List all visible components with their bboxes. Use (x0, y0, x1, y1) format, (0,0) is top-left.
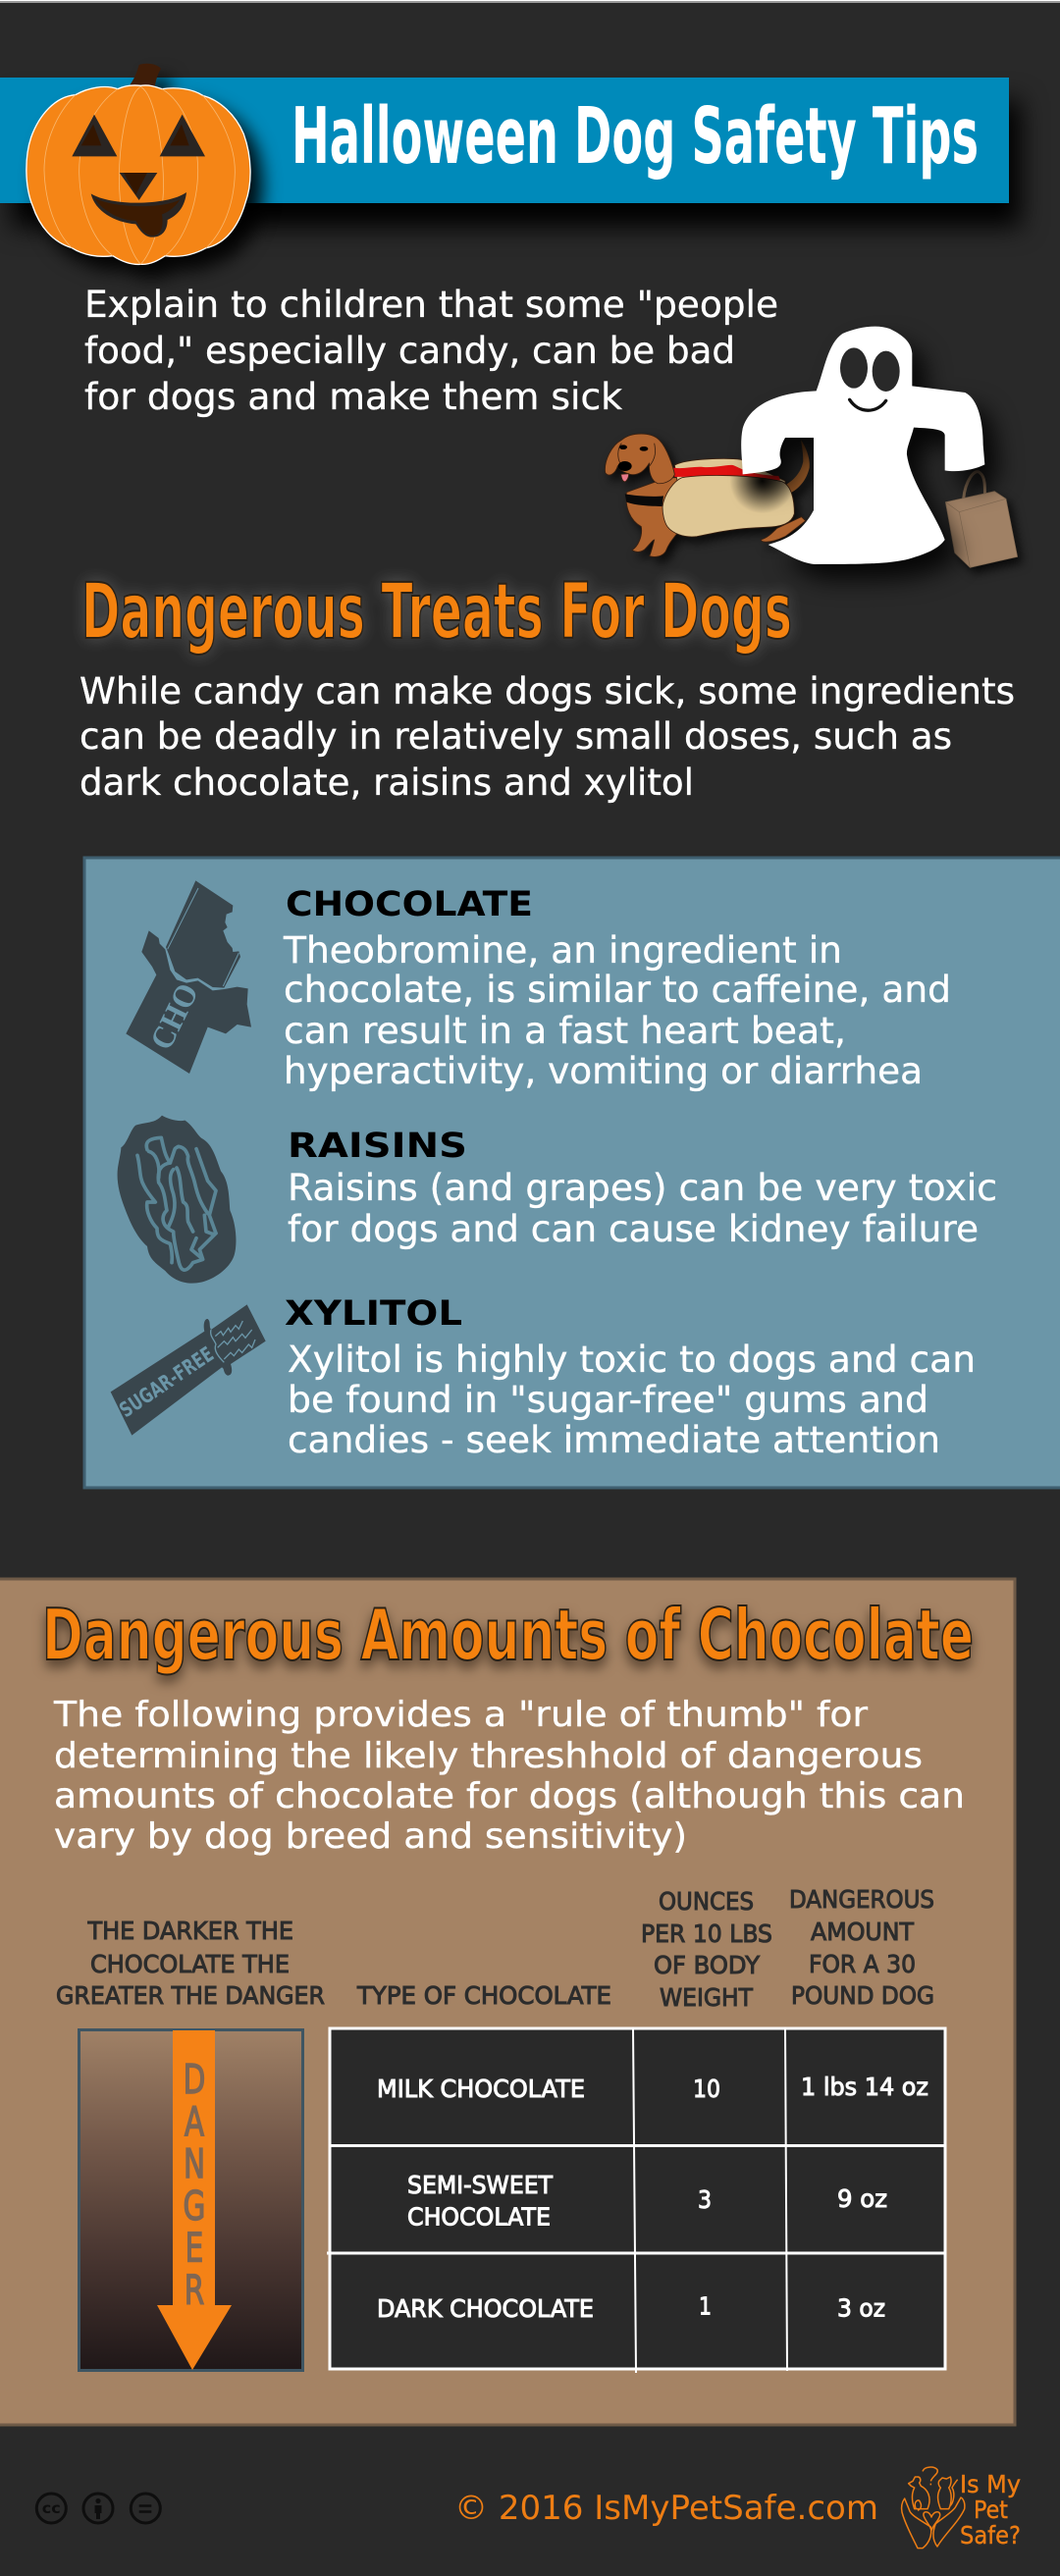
logo wordmark: Is My (960, 2470, 1021, 2498)
text: xylitol: XYLITOL (285, 1294, 462, 1334)
text: rule of thumb (53, 1695, 965, 1857)
footer copyright: © 2016 IsMyPetSafe.com (454, 2489, 878, 2528)
column header: dangerous amount: AMOUNT (811, 1918, 915, 1946)
text: chocolate (283, 885, 951, 1092)
column header: dangerous amount (789, 1885, 934, 2010)
text: treats intro: can be deadly in relatively small doses, such as (80, 715, 952, 758)
table: chocolate amounts (327, 2028, 945, 2373)
row: dark chocolate: 3 oz (837, 2294, 885, 2322)
intro text (84, 284, 778, 418)
intro text: for dogs and make them sick (84, 376, 623, 418)
column header: ounces per 10 lbs: WEIGHT (660, 1983, 754, 2012)
icon: chocolate bar (126, 880, 251, 1074)
row: milk chocolate: MILK CHOCOLATE (377, 2075, 585, 2103)
text: rule of thumb: vary by dog breed and sensitivity) (54, 1816, 687, 1857)
label: danger (184, 2057, 205, 2314)
label: danger: D (184, 2057, 205, 2103)
chart: darkness gradient with danger arrow (79, 2029, 302, 2371)
row: semi-sweet chocolate: SEMI-SWEET (407, 2171, 554, 2199)
row: dark chocolate: DARK CHOCOLATE (377, 2294, 594, 2323)
icon: ghost (741, 327, 984, 564)
row: semi-sweet chocolate: 9 oz (837, 2184, 887, 2213)
title banner (0, 78, 1009, 203)
label: danger: N (184, 2141, 205, 2187)
row: semi-sweet chocolate: CHOCOLATE (407, 2202, 551, 2232)
intro text: food," especially candy, can be bad (84, 330, 735, 372)
logo wordmark: Safe? (960, 2521, 1021, 2550)
text: chocolate: CHOCOLATE (286, 885, 533, 924)
row: dark chocolate (377, 2292, 885, 2323)
text: xylitol: Xylitol is highly toxic to dogs and can (288, 1339, 976, 1381)
panel: dangerous amounts of chocolate (0, 1579, 1015, 2425)
text: chocolate: hyperactivity, vomiting or diarrhea (284, 1050, 923, 1092)
text: sugar-free label: SUGAR-FREE (115, 1342, 218, 1422)
panel: toxic ingredients (84, 858, 1060, 1488)
intro text: Explain to children that some "people (84, 284, 778, 326)
text: raisins: Raisins (and grapes) can be very toxic (288, 1167, 997, 1209)
text: xylitol: be found in "sugar-free" gums and (288, 1379, 928, 1421)
text: rule of thumb: determining the likely threshhold of dangerous (54, 1736, 923, 1776)
text: treats intro: dark chocolate, raisins and xylitol (80, 762, 694, 804)
column header: dangerous amount: DANGEROUS (789, 1885, 934, 1914)
text: raisins (288, 1127, 997, 1250)
column header: ounces per 10 lbs: PER 10 LBS (641, 1919, 772, 1948)
text: treats intro: While candy can make dogs sick, some ingredients (80, 670, 1015, 712)
icon: trick-or-treat bag (945, 472, 1018, 567)
row: milk chocolate: 1 lbs 14 oz (801, 2073, 928, 2101)
label: danger: G (184, 2183, 205, 2230)
text: treats intro (80, 670, 1015, 804)
text: raisins: for dogs and can cause kidney failure (288, 1208, 979, 1250)
label: darker the chocolate: CHOCOLATE THE (90, 1950, 290, 1978)
text: rule of thumb: The following provides a "rule of thumb" for (53, 1695, 868, 1735)
label: darker the chocolate (56, 1917, 325, 2010)
row: semi-sweet chocolate: 3 (698, 2185, 712, 2214)
column header: ounces per 10 lbs: OF BODY (654, 1951, 761, 1979)
row: semi-sweet chocolate (407, 2171, 887, 2232)
text: rule of thumb: amounts of chocolate for dogs (although this can (54, 1776, 965, 1816)
label: danger: R (185, 2268, 204, 2314)
column header: type of chocolate: TYPE OF CHOCOLATE (356, 1981, 611, 2010)
text: chocolate: Theobromine, an ingredient in (283, 929, 842, 972)
icon: creative commons badges: cc (42, 2499, 61, 2517)
row: milk chocolate (377, 2073, 928, 2103)
text: cho wrapper lettering: CHO (144, 978, 206, 1056)
icon: creative commons badges (36, 2494, 160, 2523)
row: dark chocolate: 1 (699, 2292, 712, 2320)
column header: ounces per 10 lbs (641, 1887, 772, 2012)
icon: raisin (118, 1116, 236, 1284)
arrow: danger (157, 2030, 232, 2370)
text: raisins: RAISINS (288, 1127, 467, 1166)
label: darker the chocolate: GREATER THE DANGER (56, 1981, 325, 2010)
icon: jack-o-lantern pumpkin (26, 64, 250, 264)
column header: ounces per 10 lbs: OUNCES (659, 1887, 754, 1916)
row: milk chocolate: 10 (693, 2075, 720, 2103)
icon: dachshund in hot dog costume (605, 434, 810, 556)
logo wordmark: Pet (974, 2496, 1008, 2524)
label: danger: A (185, 2099, 205, 2145)
text: xylitol (285, 1294, 976, 1461)
icon: sugar-free gum (111, 1304, 266, 1436)
label: darker the chocolate: THE DARKER THE (87, 1917, 293, 1945)
text: xylitol: candies - seek immediate attention (288, 1419, 940, 1461)
column header: dangerous amount: POUND DOG (791, 1981, 934, 2010)
logo: is my pet safe (902, 2467, 1021, 2550)
text: chocolate: can result in a fast heart beat, (284, 1010, 846, 1052)
column header: dangerous amount: FOR A 30 (809, 1950, 916, 1978)
text: chocolate: chocolate, is similar to caffeine, and (284, 969, 951, 1011)
label: danger: E (186, 2226, 203, 2272)
